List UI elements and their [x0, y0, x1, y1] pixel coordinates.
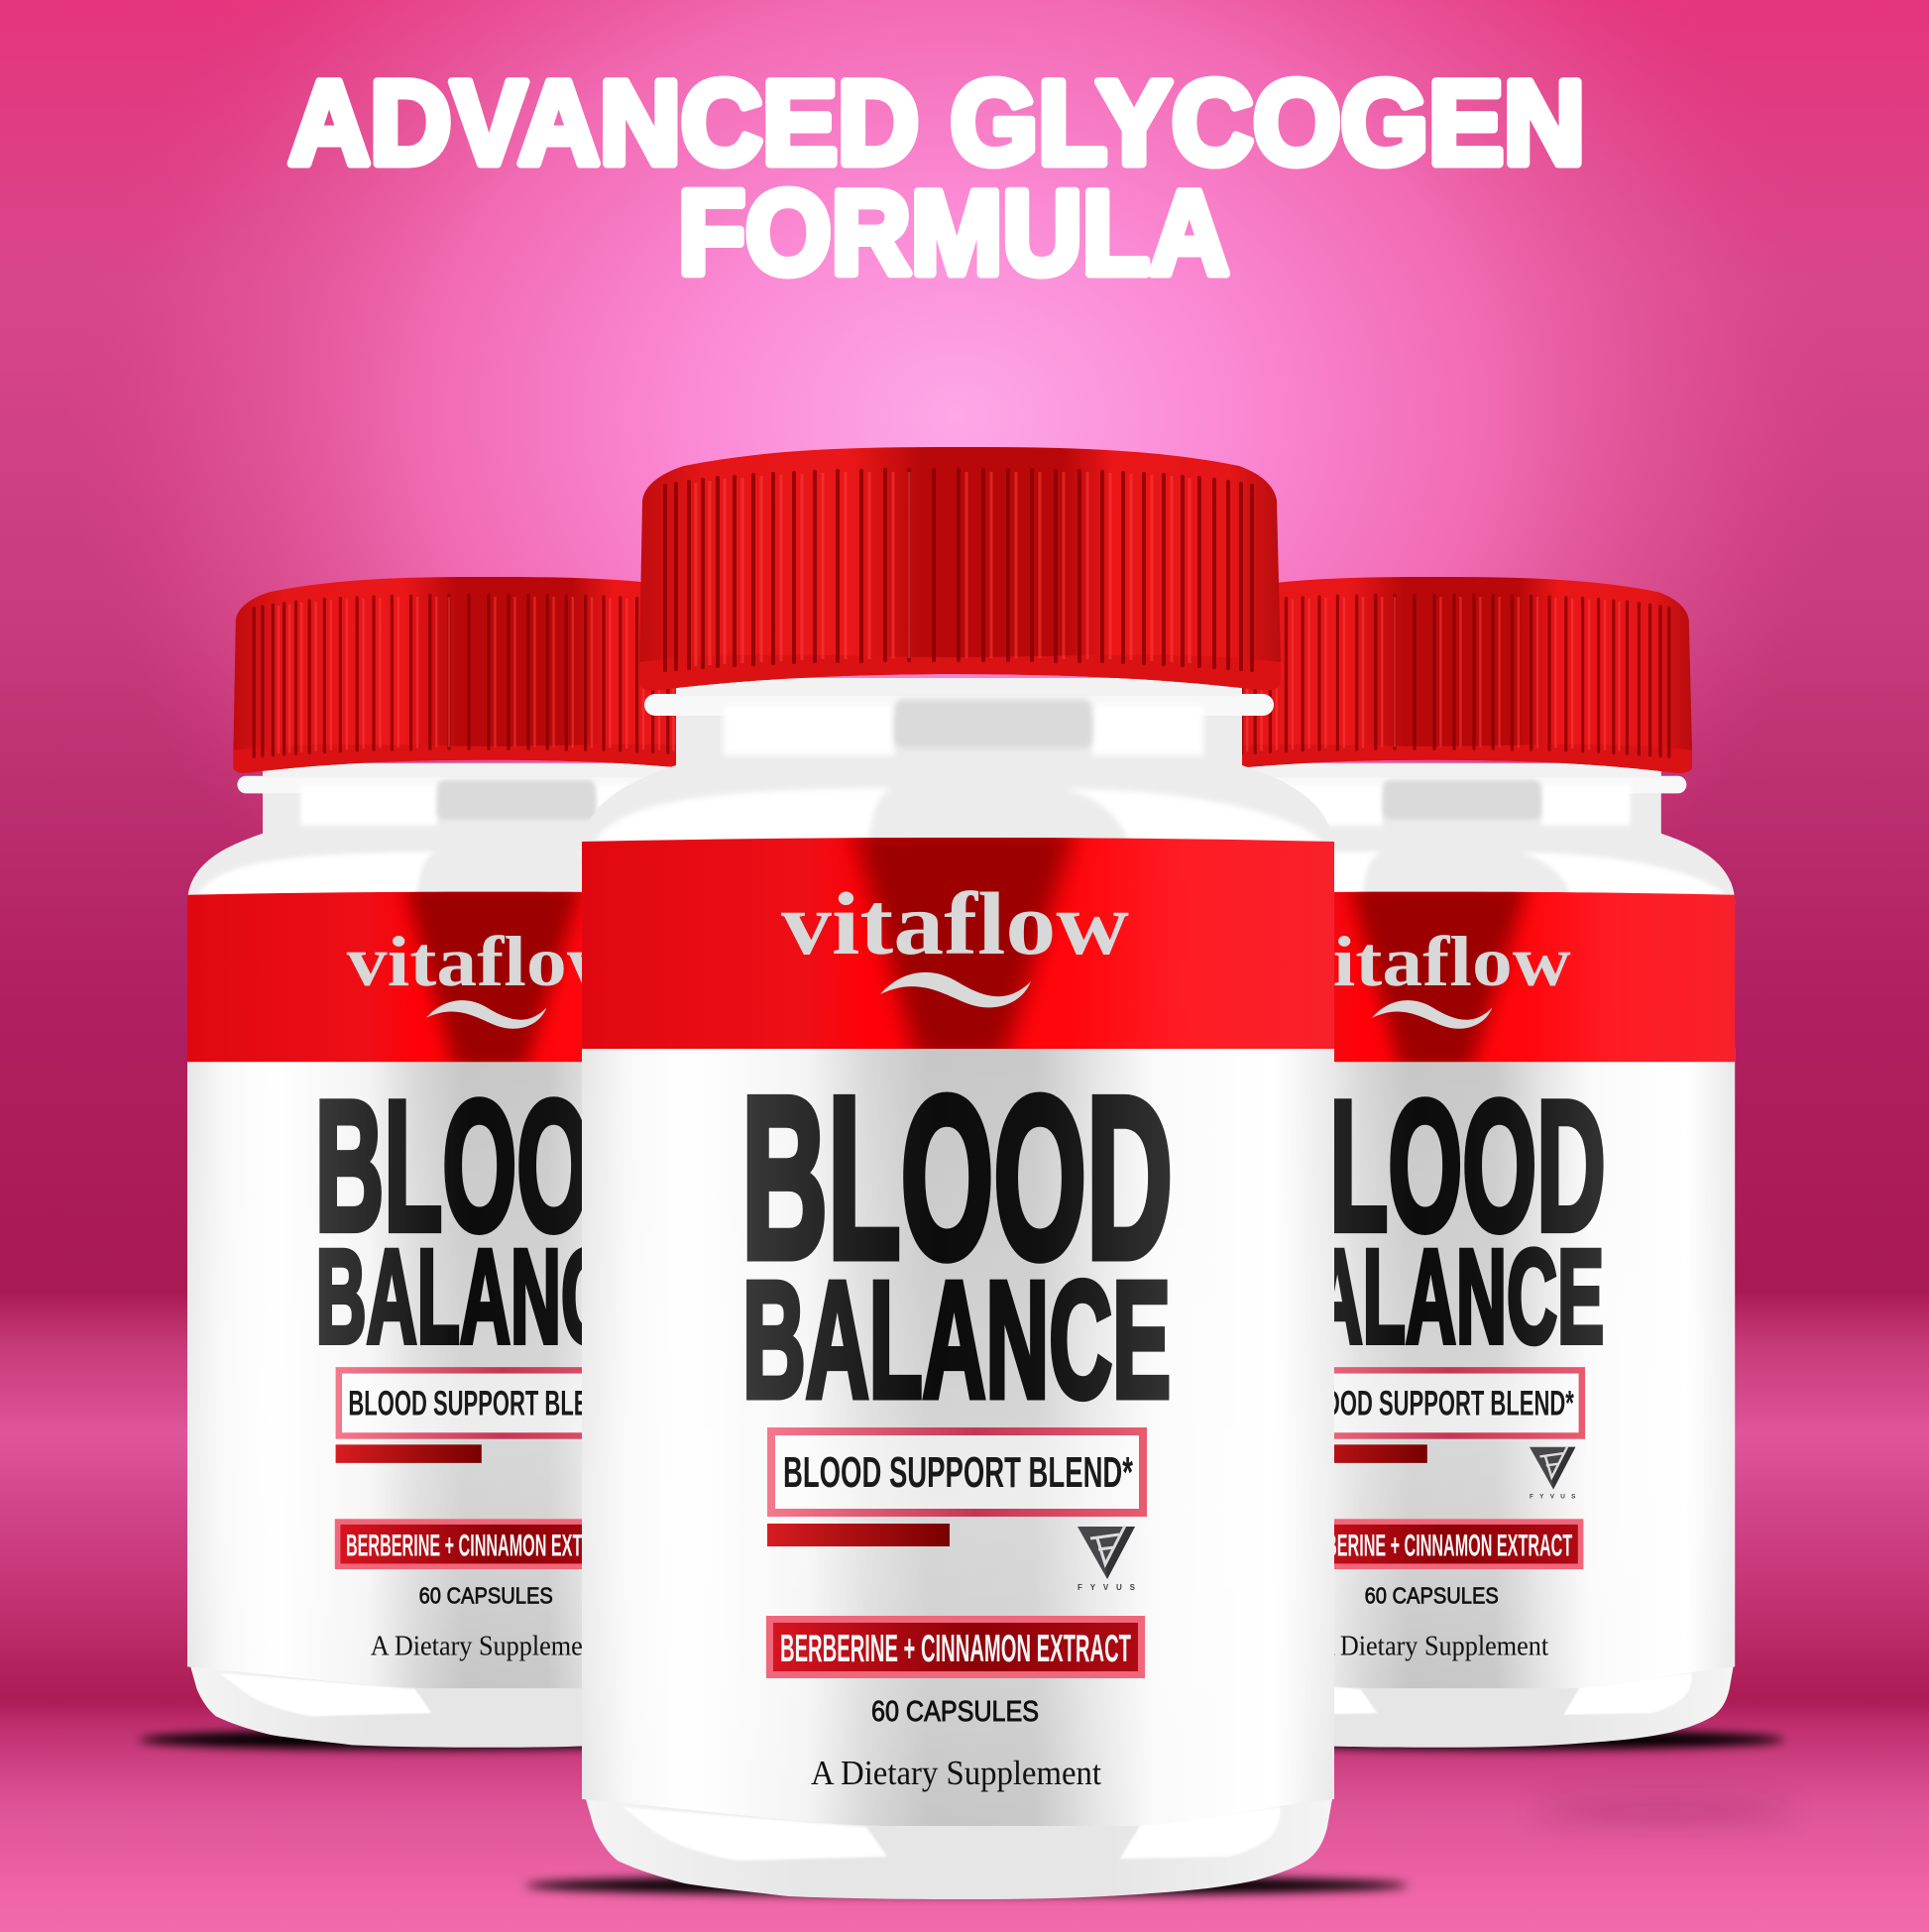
left descriptor: A Dietary Supplement [371, 1631, 603, 1661]
shadow: centre bottle [525, 1875, 1408, 1895]
right capsule count: 60 CAPSULES [1365, 1583, 1499, 1609]
title: ADVANCED GLYCOGEN [288, 57, 1585, 189]
centre blend box: BLOOD SUPPORT BLEND* [783, 1448, 1134, 1497]
left bottle shell [187, 577, 789, 1748]
centre blend box [767, 1431, 1143, 1546]
right descriptor: A Dietary Supplement [1316, 1631, 1548, 1661]
left blend box [336, 1370, 636, 1463]
centre logo [1078, 1526, 1136, 1592]
left product name: BLOOD [315, 1063, 660, 1270]
left blend box: BLOOD SUPPORT BLEND* [348, 1384, 628, 1423]
left product name [315, 1063, 660, 1371]
left brand [347, 922, 625, 1029]
left ingredient box: BERBERINE + CINNAMON EXTRACT [346, 1528, 626, 1562]
left product name: BALANCE [316, 1223, 658, 1371]
right ingredient box: BERBERINE + CINNAMON EXTRACT [1292, 1528, 1572, 1562]
right bottle shell [1133, 577, 1735, 1748]
left brand: vitaflow [347, 922, 625, 1001]
centre capsule count: 60 CAPSULES [871, 1696, 1039, 1728]
centre brand [781, 875, 1129, 1007]
shadow: back bottles [139, 1730, 1794, 1821]
background floor [0, 1294, 1929, 1932]
centre product name [741, 1050, 1173, 1432]
centre product name: BALANCE [742, 1248, 1171, 1432]
right logo [1530, 1446, 1576, 1500]
centre ingredient box: BERBERINE + CINNAMON EXTRACT [780, 1628, 1131, 1670]
centre ingredient box [769, 1620, 1142, 1675]
background wall [0, 0, 1929, 1294]
title: FORMULA [678, 167, 1229, 299]
centre descriptor: A Dietary Supplement [811, 1754, 1101, 1792]
centre brand: vitaflow [781, 875, 1129, 973]
left logo [584, 1446, 630, 1500]
centre bottle shell [582, 447, 1334, 1899]
right brand: vitaflow [1293, 922, 1571, 1001]
left ingredient box [338, 1522, 635, 1566]
centre logo: FYVUS [1078, 1583, 1136, 1592]
bottle: left [187, 577, 789, 1748]
right ingredient box [1284, 1522, 1581, 1566]
right product name [1261, 1063, 1606, 1371]
left capsule count: 60 CAPSULES [419, 1583, 553, 1609]
bottle: centre [582, 447, 1334, 1899]
bottle: right [1133, 577, 1735, 1748]
left logo: FYVUS [584, 1493, 630, 1500]
right brand [1293, 922, 1571, 1029]
right blend box [1282, 1370, 1582, 1463]
right product name: BALANCE [1262, 1223, 1604, 1371]
right logo: FYVUS [1530, 1493, 1576, 1500]
right product name: BLOOD [1261, 1063, 1606, 1270]
title [288, 57, 1585, 299]
centre product name: BLOOD [741, 1050, 1173, 1307]
right blend box: BLOOD SUPPORT BLEND* [1294, 1384, 1574, 1423]
